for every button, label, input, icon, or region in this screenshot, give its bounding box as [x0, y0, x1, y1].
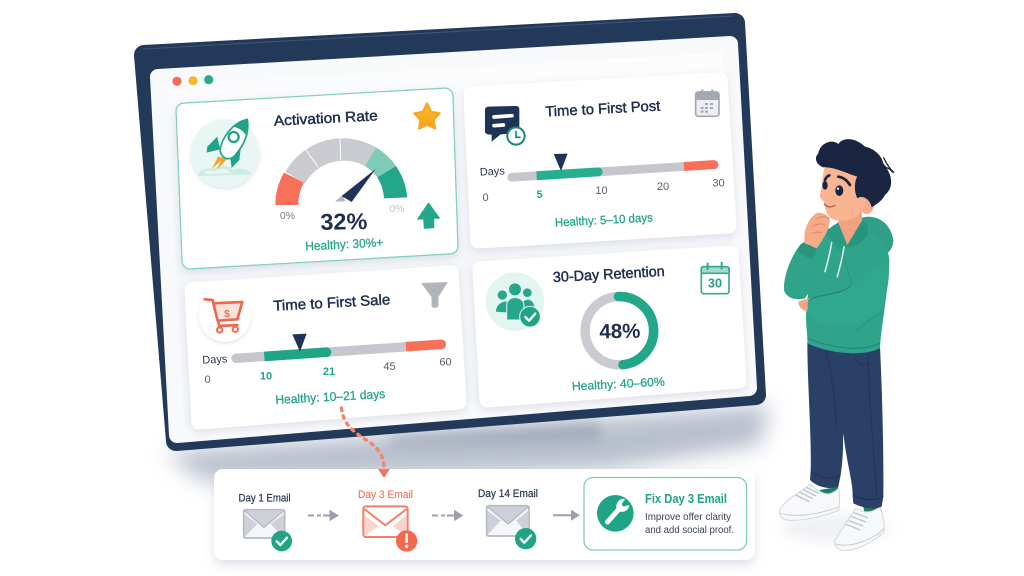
hand and sleeve [804, 213, 830, 248]
icon: wrench [597, 495, 634, 532]
icon: chat bubble with clock [479, 104, 525, 149]
chart: donut [585, 296, 654, 365]
torso and hoodie [784, 139, 894, 353]
arrow: dashed [308, 512, 337, 520]
axis labels: 0 [204, 374, 211, 386]
step: day 3 email [358, 489, 417, 552]
panel: time to first sale [192, 273, 459, 422]
axis labels [202, 353, 452, 407]
axis labels: 10 [260, 370, 272, 382]
panel: 30-day retention [480, 253, 739, 400]
health range label: Healthy: 40–60% [571, 375, 665, 393]
icon: calendar [696, 89, 719, 116]
heading: Time to First Sale [273, 292, 391, 315]
callout: fix day 3 email [584, 478, 746, 550]
step: day 14 email: Day 14 Email [478, 488, 538, 500]
icon: up arrow [418, 204, 439, 228]
icon: star [414, 104, 440, 128]
panel: email sequence [214, 469, 755, 560]
icon: funnel [422, 282, 447, 308]
monitor screen [158, 44, 749, 435]
step: day 3 email: Day 3 Email [358, 489, 413, 501]
icon: shopping cart: $ [224, 309, 230, 320]
panel: activation rate [184, 96, 450, 261]
axis labels: Days [480, 165, 506, 179]
callout: fix day 3 email: Improve offer clarity [645, 512, 731, 523]
icon: rocket [191, 119, 259, 188]
axis labels: 45 [383, 361, 396, 373]
legs and shoes [780, 342, 884, 551]
callout: fix day 3 email: Fix Day 3 Email [645, 491, 727, 506]
step: day 14 email [478, 488, 538, 549]
icon: people with check [486, 272, 544, 331]
chart: range bar [236, 334, 446, 358]
monitor shadow [165, 405, 770, 480]
axis labels: Healthy: 5–10 days [554, 210, 653, 230]
axis labels [480, 165, 725, 230]
axis labels: Days [202, 353, 228, 367]
person thinking [780, 139, 894, 551]
head [859, 194, 874, 214]
gauge labels: 0% [389, 203, 405, 215]
icon: calendar 30 [701, 262, 729, 294]
callout: fix day 3 email: and add social proof. [645, 525, 734, 536]
arrow: solid [553, 512, 578, 519]
window control dots [172, 75, 213, 86]
heading: Activation Rate [273, 108, 378, 130]
gauge labels: Healthy: 30%+ [305, 235, 384, 254]
icon: calendar 30: 30 [708, 276, 722, 290]
step: day 1 email [238, 492, 292, 551]
axis labels: 0 [482, 192, 489, 204]
panel: time to first post [471, 80, 729, 241]
step: day 1 email: Day 1 Email [238, 492, 290, 504]
arrow: dotted link from sale to day 3 email [342, 408, 390, 478]
heading: Time to First Post [545, 99, 661, 121]
arrow: dashed [432, 512, 462, 520]
chart: donut: 48% [599, 320, 641, 343]
chart: gauge [275, 138, 407, 205]
axis labels: 5 [536, 189, 543, 201]
axis labels: Healthy: 10–21 days [275, 387, 386, 407]
axis labels: 21 [323, 366, 335, 378]
axis labels: 60 [439, 356, 452, 368]
gauge labels: 32% [320, 208, 368, 235]
gauge labels: 0% [280, 210, 295, 222]
axis labels: 20 [657, 181, 669, 193]
icon: shopping cart [199, 290, 251, 342]
axis labels: 10 [595, 185, 608, 197]
monitor frame [143, 16, 756, 441]
gauge labels [280, 203, 405, 254]
axis labels: 30 [712, 178, 725, 190]
heading: 30-Day Retention [552, 264, 665, 286]
chart: range bar [512, 154, 718, 177]
